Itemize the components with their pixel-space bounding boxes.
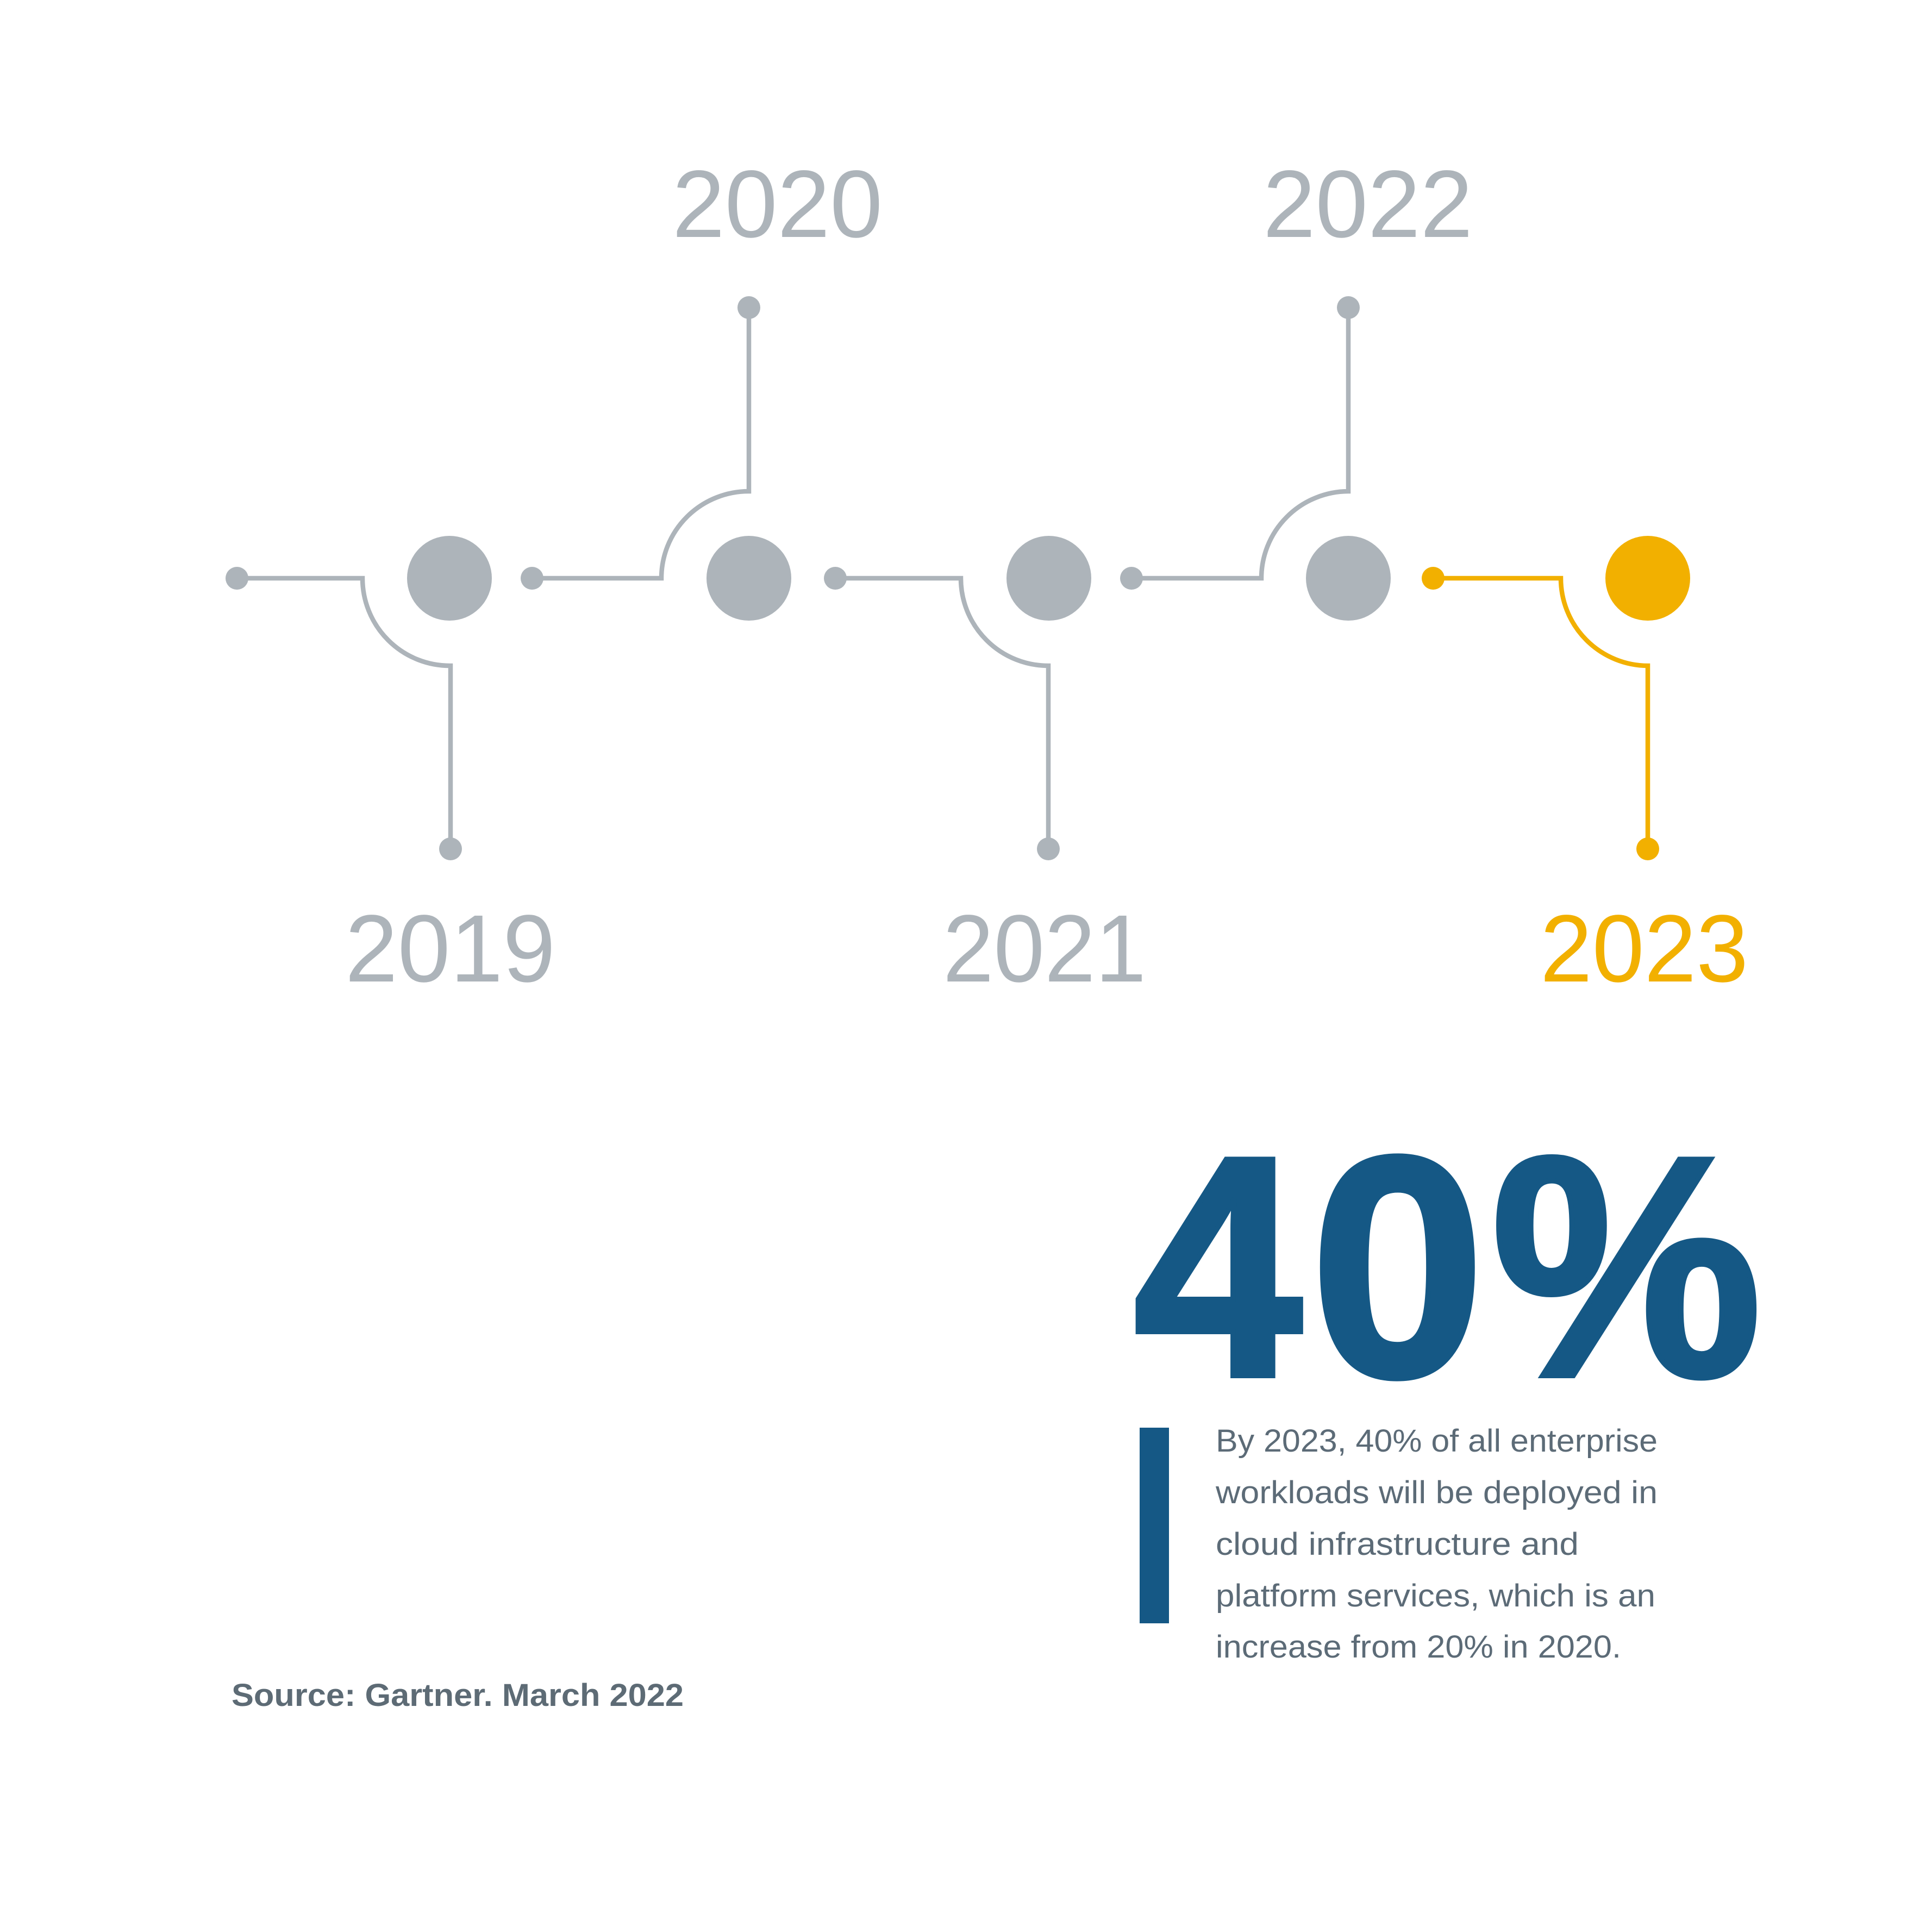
big statistic: 40%: 4 xyxy=(1134,1092,1304,1442)
milestone: 2022: 2022 xyxy=(1263,151,1473,258)
milestone: 2020: 2020 xyxy=(672,151,883,258)
milestone: 2021: 2021 xyxy=(943,896,1146,1002)
source note: Source: Gartner. March 2022 xyxy=(232,1678,684,1713)
milestone: 2019 xyxy=(226,536,555,1002)
timeline xyxy=(226,151,1748,1002)
big statistic: 40% xyxy=(1134,1092,1762,1442)
big statistic: 40%: 0 xyxy=(1310,1092,1485,1442)
milestone: 2020 xyxy=(521,151,883,621)
description paragraph: By 2023, 40% of all enterprise xyxy=(1216,1423,1658,1459)
milestone: 2021 xyxy=(824,536,1146,1002)
description paragraph: cloud infrastructure and xyxy=(1216,1527,1579,1562)
description paragraph: increase from 20% in 2020. xyxy=(1216,1629,1621,1665)
description paragraph xyxy=(1215,1423,1658,1665)
description paragraph: platform services, which is an xyxy=(1216,1578,1655,1614)
milestone: 2023: 2023 xyxy=(1540,896,1748,1002)
milestone: 2019: 2019 xyxy=(345,896,555,1002)
description paragraph: workloads will be deployed in xyxy=(1215,1475,1658,1510)
milestone: 2022 xyxy=(1120,151,1473,621)
big statistic: 40%: % xyxy=(1491,1092,1762,1442)
accent bar xyxy=(1140,1428,1169,1623)
milestone: 2023 xyxy=(1422,536,1748,1002)
